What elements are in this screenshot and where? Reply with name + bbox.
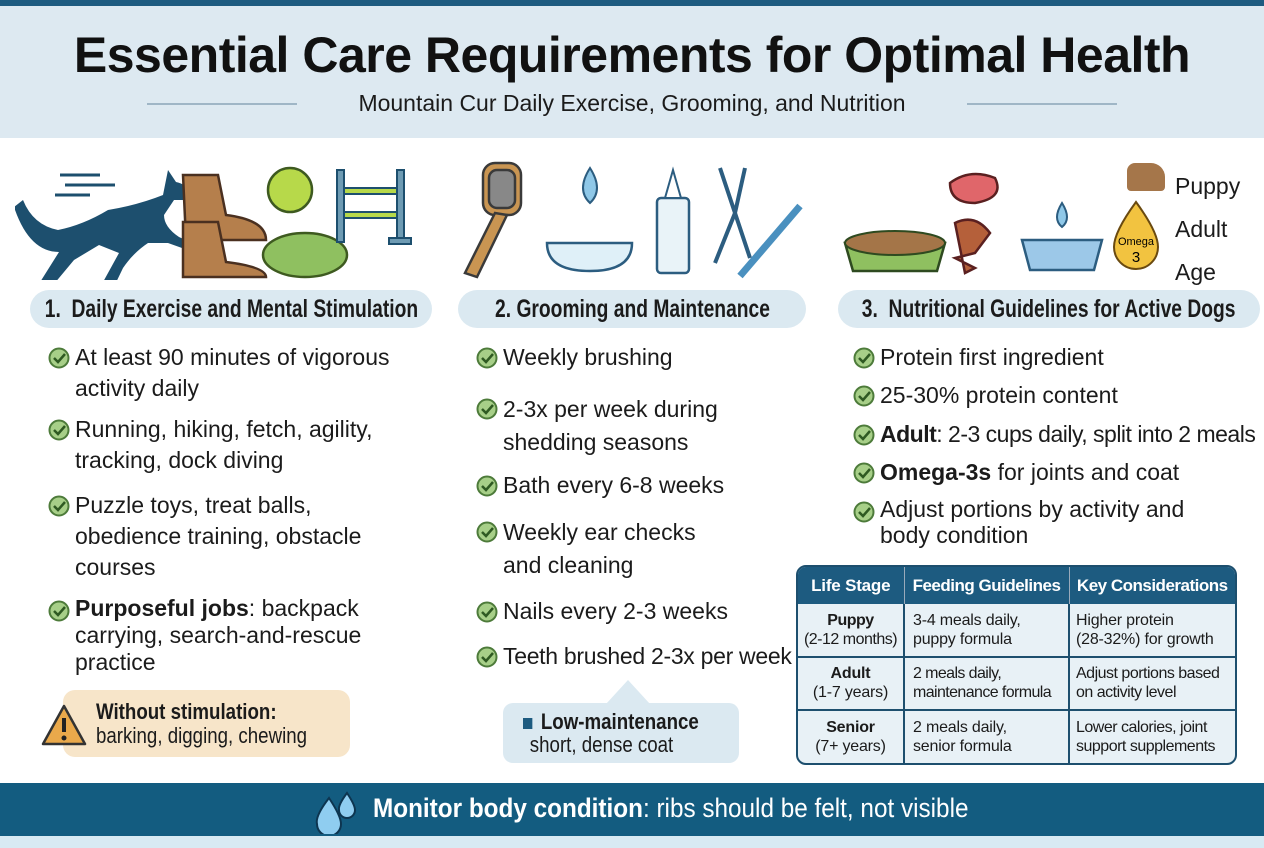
bullet: Protein first ingredient xyxy=(880,344,1104,370)
callout: low maintenance xyxy=(503,680,739,763)
feeding table: Adult xyxy=(831,665,870,682)
feeding table: (2-12 months) xyxy=(804,631,897,648)
heading 1: 1. Daily Exercise and Mental Stimulation xyxy=(44,295,418,323)
panel: grooming xyxy=(458,290,806,763)
bullet: tracking, dock diving xyxy=(75,447,283,473)
feeding table: Key Considerations xyxy=(1077,576,1228,595)
life stage labels: Puppy xyxy=(1175,173,1240,199)
feeding table: on activity level xyxy=(1076,684,1176,701)
bullet: Weekly brushing xyxy=(503,344,673,370)
feeding table: Life Stage xyxy=(811,576,890,595)
feeding table: 2 meals daily, xyxy=(913,665,1001,682)
feeding table: (28-32%) for growth xyxy=(1076,631,1214,648)
bullet: courses xyxy=(75,554,156,580)
bullet xyxy=(476,519,696,578)
header band xyxy=(0,6,1264,138)
icon: puppy xyxy=(1127,163,1165,191)
feeding table: senior formula xyxy=(913,738,1012,755)
bullet: body condition xyxy=(880,522,1028,548)
icons: exercise xyxy=(15,166,412,280)
feeding table: (1-7 years) xyxy=(813,684,888,701)
feeding table: Senior xyxy=(826,719,875,736)
subtitle: Mountain Cur Daily Exercise, Grooming, and Nutrition xyxy=(358,90,906,116)
bullet xyxy=(48,344,390,401)
footer text: Monitor body condition: ribs should be felt, not visible xyxy=(373,793,968,823)
bullet: practice xyxy=(75,649,156,675)
icon: water drops xyxy=(316,792,356,834)
title: Essential Care Requirements for Optimal Health xyxy=(74,27,1190,83)
panel: nutrition xyxy=(838,290,1260,548)
bullet: Running, hiking, fetch, agility, xyxy=(75,416,372,442)
icons: nutrition xyxy=(843,172,1104,275)
icon: omega: 3 xyxy=(1132,249,1140,266)
bullet: Adult: 2-3 cups daily, split into 2 meals xyxy=(880,421,1255,447)
bullet: carrying, search-and-rescue xyxy=(75,622,361,648)
heading 3 xyxy=(838,290,1260,328)
panel: exercise xyxy=(30,290,432,757)
life stage labels xyxy=(1175,173,1240,285)
bullet: Purposeful jobs: backpack xyxy=(75,595,359,621)
heading 2 xyxy=(458,290,806,328)
icon: omega: Omega xyxy=(1118,236,1155,248)
bullet: Adjust portions by activity and xyxy=(880,496,1184,522)
bullet: Teeth brushed 2-3x per week xyxy=(503,643,792,669)
feeding table: support supplements xyxy=(1076,738,1215,755)
feeding table: 2 meals daily, xyxy=(913,719,1007,736)
top stripe xyxy=(0,0,1264,6)
feeding table: puppy formula xyxy=(913,631,1012,648)
feeding table: 3-4 meals daily, xyxy=(913,612,1021,629)
icons: grooming xyxy=(463,162,803,278)
bullet xyxy=(476,396,718,455)
bullet: and cleaning xyxy=(503,552,633,578)
bullet: shedding seasons xyxy=(503,429,688,455)
bullet: obedience training, obstacle xyxy=(75,523,361,549)
bullet: At least 90 minutes of vigorous xyxy=(75,344,390,370)
icon: omega xyxy=(1113,200,1159,270)
feeding table: Feeding Guidelines xyxy=(913,576,1060,595)
life stage labels: Age xyxy=(1175,259,1216,285)
callout: low maintenance: short, dense coat xyxy=(530,732,673,757)
bullet: Weekly ear checks xyxy=(503,519,696,545)
bullet: Bath every 6-8 weeks xyxy=(503,472,724,498)
bullet xyxy=(48,595,361,675)
bullet xyxy=(854,496,1184,548)
feeding table: Lower calories, joint xyxy=(1076,719,1207,736)
bullet: Omega-3s for joints and coat xyxy=(880,459,1179,485)
feeding table: (7+ years) xyxy=(815,738,886,755)
heading 2: 2. Grooming and Maintenance xyxy=(495,295,769,323)
warning callout: Without stimulation: xyxy=(96,699,277,724)
warning callout xyxy=(63,690,350,757)
bullet xyxy=(48,416,372,473)
feeding table: Higher protein xyxy=(1076,612,1174,629)
feeding table: maintenance formula xyxy=(913,684,1051,701)
bullet: activity daily xyxy=(75,375,199,401)
bullet: 25-30% protein content xyxy=(880,382,1118,408)
icon: warning xyxy=(42,704,86,746)
bullet: Puzzle toys, treat balls, xyxy=(75,492,312,518)
warning callout: barking, digging, chewing xyxy=(96,723,307,748)
footer banner xyxy=(0,783,1264,836)
heading 3: 3. Nutritional Guidelines for Active Dogs xyxy=(862,295,1236,323)
feeding table: Puppy xyxy=(827,612,874,629)
life stage labels: Adult xyxy=(1175,216,1227,242)
bullet: Nails every 2-3 weeks xyxy=(503,598,728,624)
feeding table xyxy=(796,565,1237,765)
heading 1 xyxy=(30,290,432,328)
bullet xyxy=(48,492,361,580)
feeding table: Adjust portions based xyxy=(1076,665,1219,682)
callout: low maintenance: Low-maintenance xyxy=(541,709,699,734)
bullet: 2-3x per week during xyxy=(503,396,718,422)
